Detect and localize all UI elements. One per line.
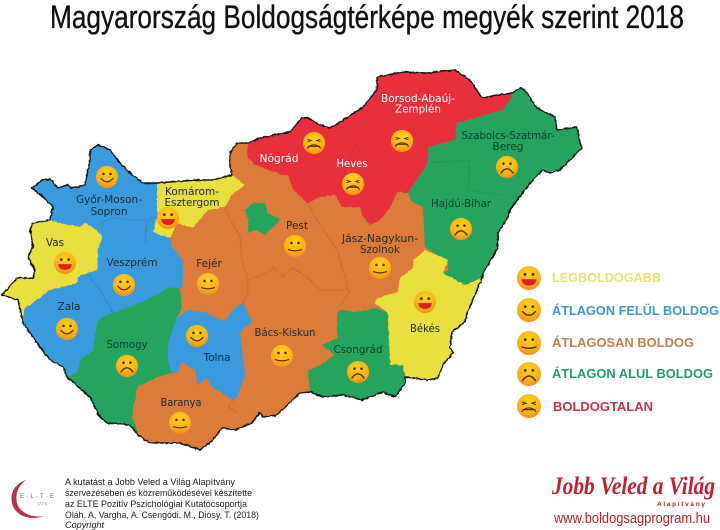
icon: Nógrád unhappy (303, 132, 325, 154)
label: Tolna: Tolna (202, 352, 231, 364)
credits text block: Copyright (65, 520, 104, 530)
icon: Tolna smile (186, 325, 208, 347)
label: Heves: Heves (336, 158, 368, 170)
legend item: boldogtalan: BOLDOGTALAN (553, 400, 653, 414)
label: Békés: Békés (410, 323, 440, 335)
icon: Jász-Nagykun-Szolnok neutral (369, 257, 391, 279)
region: Budapest (245, 203, 280, 235)
legend item: átlagosan boldog (517, 331, 694, 355)
icon: Somogy sad (116, 355, 138, 377)
inner county borders (87, 130, 505, 413)
map of Hungary counties (2, 70, 582, 450)
label: Vas: Vas (46, 237, 64, 249)
country outline (2, 70, 582, 450)
icon: Vas grin (54, 252, 76, 274)
region: Vas (2, 220, 102, 317)
region: Szabolcs-Szatmár-Bereg and Hajdú-Bihar (408, 88, 582, 285)
foundation logo (551, 473, 715, 527)
label: Zala: Zala (58, 301, 80, 313)
ELTE logo: PPK (38, 502, 49, 508)
region: Somogy (67, 287, 182, 435)
icon: Fejér neutral (197, 273, 219, 295)
county labels (46, 93, 555, 409)
icon: Heves unhappy (342, 173, 364, 195)
county faces (54, 130, 518, 434)
label: Borsod-Abaúj-Zemplén: Borsod-Abaúj- (381, 93, 455, 105)
ELTE logo: E·L·T·E (20, 494, 54, 500)
icon: Bács-Kiskun neutral (271, 345, 293, 367)
legend item: legboldogabb: LEGBOLDOGABB (552, 271, 661, 285)
region: Komárom-Esztergom (153, 175, 245, 238)
icon: Komárom-Esztergom grin (157, 207, 179, 229)
label: Győr-Moson-Sopron: Sopron (90, 206, 128, 218)
icon: Baranya neutral (169, 412, 191, 434)
icon: Győr-Moson-Sopron smile (96, 166, 118, 188)
legend (517, 266, 719, 418)
label: Jász-Nagykun-Szolnok: Szolnok (360, 244, 401, 256)
label: Győr-Moson-Sopron: Győr-Moson- (76, 194, 142, 206)
icon: Szabolcs sad (496, 156, 518, 178)
label: Szabolcs-Szatmár-Bereg: Szabolcs-Szatmár- (462, 130, 555, 142)
region: Tolna (168, 303, 252, 400)
label: Bács-Kiskun: Bács-Kiskun (254, 327, 316, 339)
label: Nógrád: Nógrád (260, 153, 298, 165)
region: Győr-Moson-Sopron (32, 145, 157, 243)
label: Somogy: Somogy (106, 339, 148, 351)
label: Csongrád: Csongrád (334, 344, 382, 356)
legend item: boldogtalan (517, 394, 653, 418)
label: Baranya: Baranya (160, 397, 202, 409)
region: Északi red counties (247, 70, 512, 225)
label: Jász-Nagykun-Szolnok: Jász-Nagykun- (341, 233, 418, 245)
region: Zala (23, 273, 113, 377)
credits text block: A kutatást a Jobb Veled a Világ Alapítvány (65, 477, 235, 487)
icon: Pest neutral (284, 235, 306, 257)
label: Borsod-Abaúj-Zemplén: Zemplén (395, 104, 441, 116)
region: orange base (Pest, Bács-Kiskun, Jász-Nagykun-Szolnok) (2, 70, 582, 450)
region: Békés (375, 250, 482, 380)
icon: Borsod unhappy (391, 130, 413, 152)
label: Pest: Pest (286, 220, 308, 232)
label: Veszprém: Veszprém (106, 257, 158, 269)
ELTE logo (12, 480, 54, 518)
region: Veszprém (85, 218, 183, 313)
credits text block: szervezésében és közreműködésével készítette (65, 488, 252, 498)
icon: Veszprém smile (113, 274, 135, 296)
icon: Békés grin (414, 291, 436, 313)
region: Csongrád (308, 308, 405, 400)
credits text block (65, 477, 259, 530)
label: Komárom-Esztergom: Esztergom (164, 197, 220, 209)
label: Komárom-Esztergom: Komárom- (165, 186, 219, 198)
legend item: legboldogabb (517, 266, 661, 290)
label: Fejér: Fejér (196, 258, 222, 270)
icon: Csongrád sad (347, 361, 369, 383)
icon: Zala smile (56, 318, 78, 340)
icon: Hajdú-Bihar sad (450, 218, 472, 240)
legend item: átlagosan boldog: ÁTLAGOSAN BOLDOG (552, 335, 694, 350)
label: Hajdú-Bihar: Hajdú-Bihar (431, 198, 492, 210)
legend item: átlagon felül boldog (517, 298, 719, 322)
credits text block: Oláh, A, Vargha, A. Csengódi, M., Diósy, T. (2018) (65, 510, 259, 520)
credits text block: az ELTE Pozitív Pszichológiai Kutatócsoportja (65, 499, 247, 509)
foundation logo: Alapítvány (657, 501, 705, 508)
legend item: átlagon alul boldog (517, 362, 713, 386)
legend item: átlagon felül boldog: ÁTLAGON FELÜL BOLDOG (552, 303, 719, 318)
legend item: átlagon alul boldog: ÁTLAGON ALUL BOLDOG (552, 366, 713, 381)
label: Szabolcs-Szatmár-Bereg: Bereg (492, 141, 524, 153)
